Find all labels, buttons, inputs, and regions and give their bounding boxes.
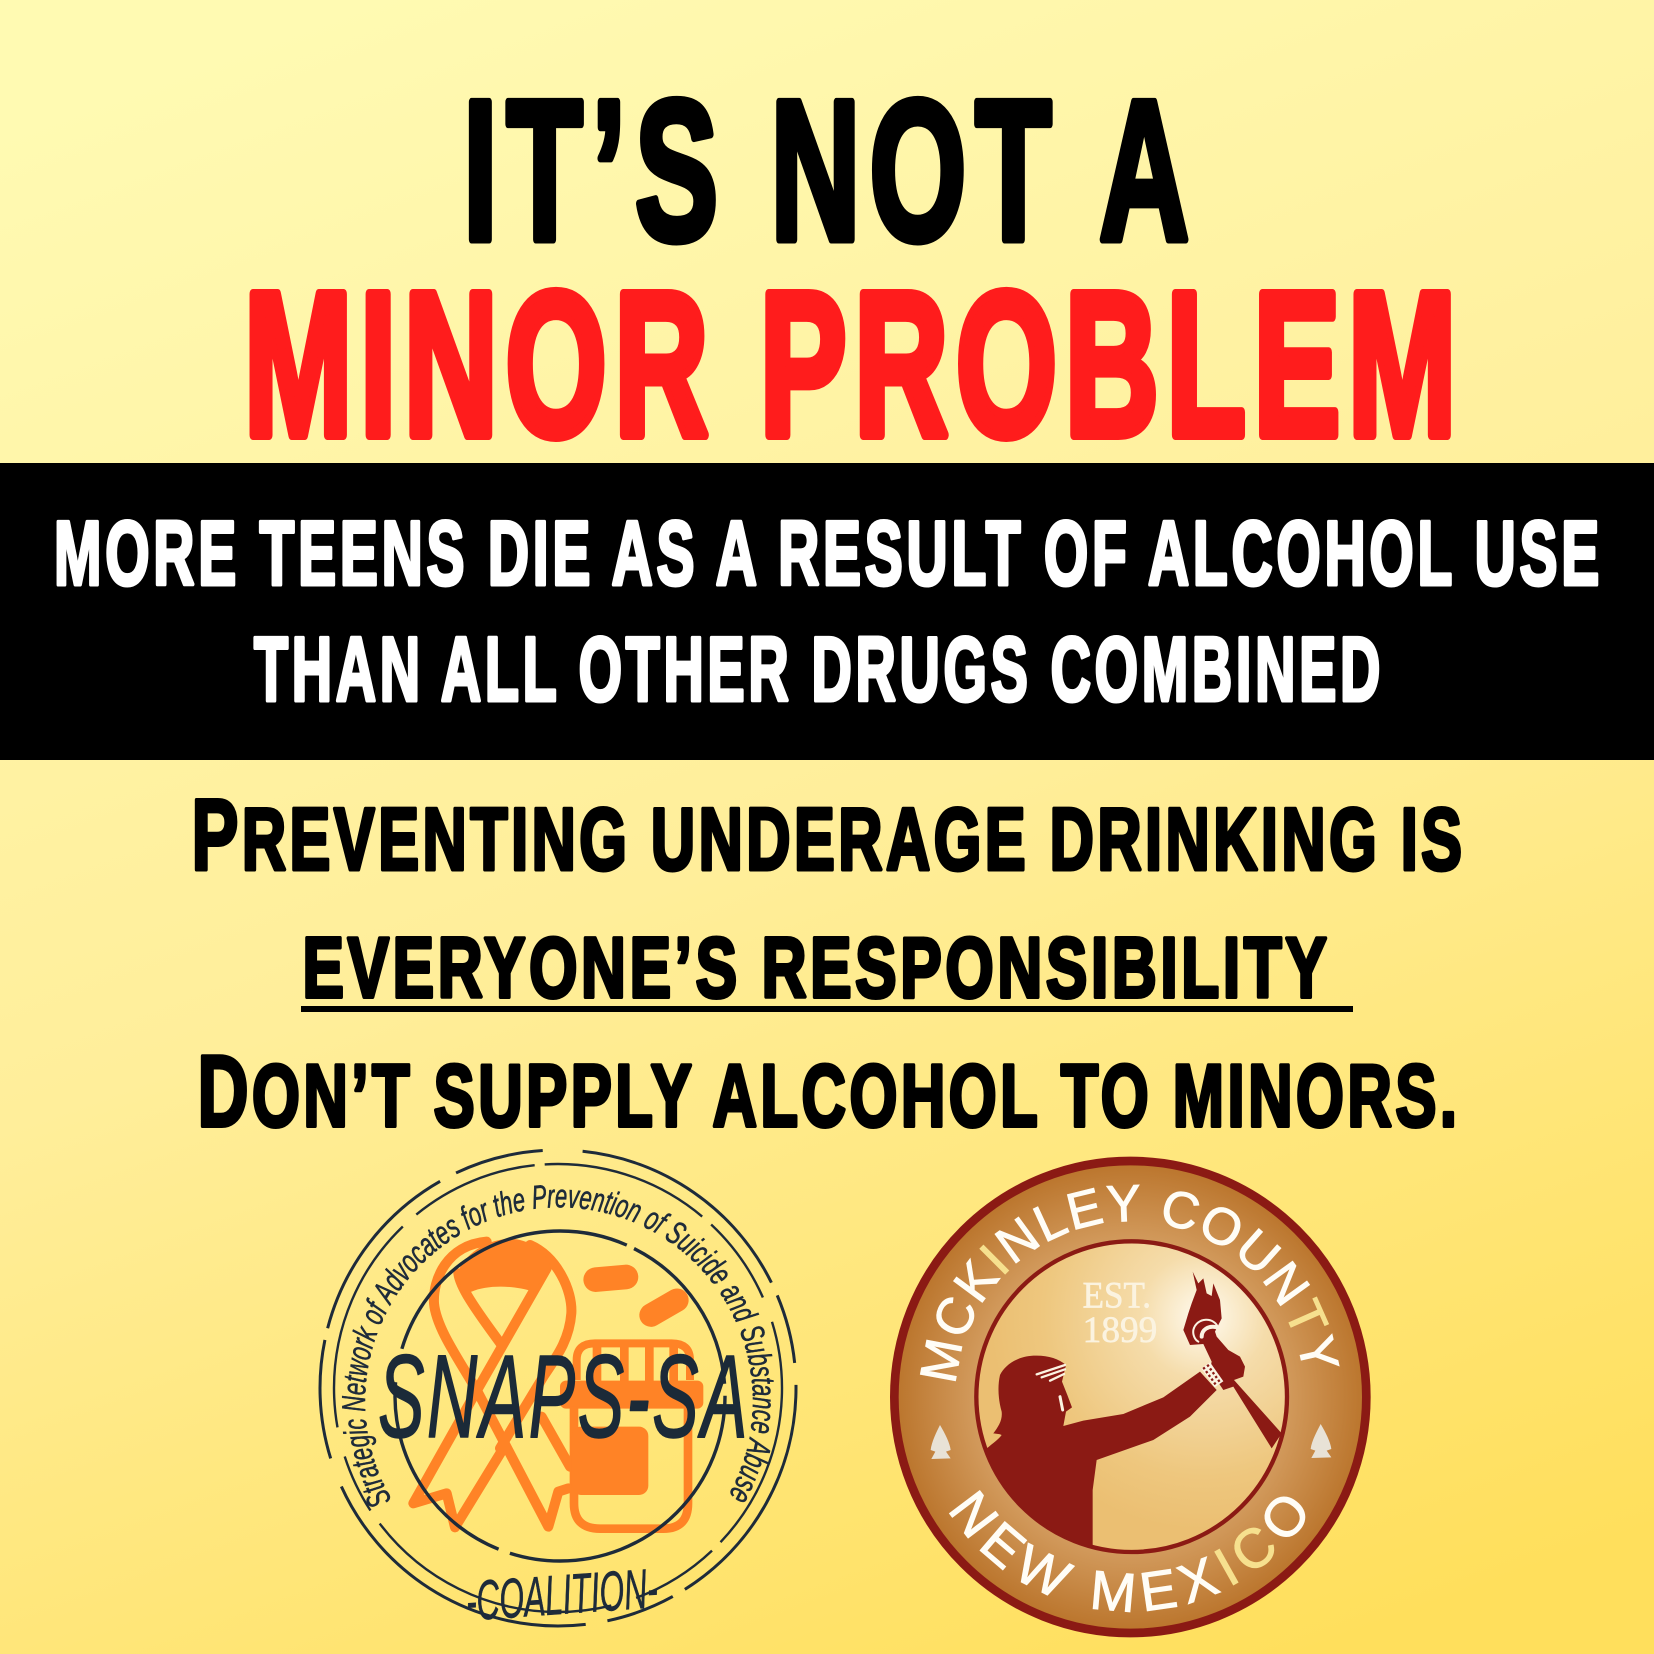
arrowheads: [931, 1424, 1331, 1459]
seal outer ring: [894, 1161, 1366, 1633]
title line: it's not a: IT’S NOT A: [463, 60, 1198, 282]
bracelet beads: [1203, 1365, 1221, 1386]
SNAPS-SA wordmark: SNAPS-SA: [378, 1331, 750, 1463]
ribbon top fold: [457, 1239, 551, 1293]
title: [244, 60, 1464, 479]
figure highlights: [1037, 1320, 1219, 1410]
pills: [582, 1264, 693, 1331]
banner text: [54, 504, 1603, 720]
established date: [1083, 1276, 1157, 1351]
established date: EST.: [1083, 1276, 1151, 1317]
circular organisation name: Strategic Network of Advocates for the Prevention of Suicide and Substance Abuse: [342, 1185, 774, 1507]
message text: [192, 780, 1466, 1148]
logo: McKinley County seal: [890, 1156, 1371, 1638]
black banner: [0, 463, 1654, 760]
stamp rings: [320, 1150, 796, 1626]
orange ribbon and bottle icon: [413, 1239, 703, 1529]
underline: [301, 1006, 1353, 1012]
seal inner disc: [976, 1241, 1287, 1552]
seal text: New Mexico: NEW MEXICO: [948, 1490, 1306, 1612]
bottle: [560, 1343, 703, 1529]
logo: SNAPS-SA coalition: [318, 1149, 798, 1632]
established date: 1899: [1083, 1310, 1157, 1351]
seal text: McKinley County: MCKINLEY COUNTY: [920, 1184, 1340, 1382]
coalition label: -COALITION-: [464, 1556, 660, 1632]
figure holding torch: [987, 1272, 1281, 1545]
